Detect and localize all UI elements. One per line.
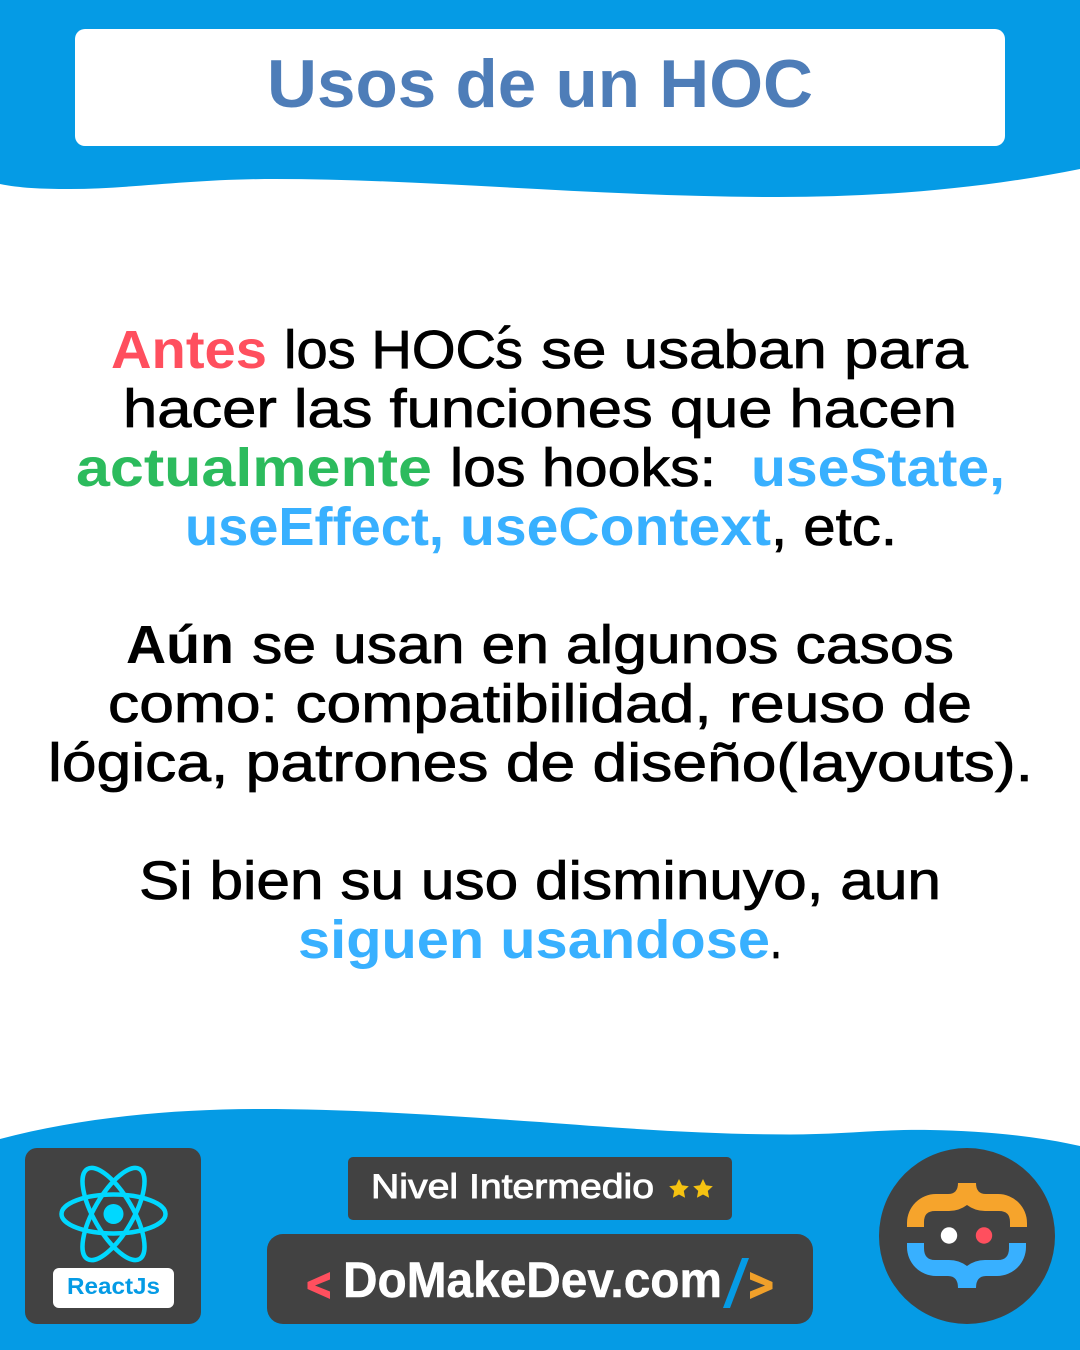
- paragraph 1: s: [495, 320, 523, 380]
- paragraph 1: hacer las funciones que hacen: [123, 379, 957, 439]
- paragraph 1: los hooks:: [450, 438, 716, 498]
- paragraph 3: Si bien su uso disminuyo, aun: [139, 851, 941, 911]
- paragraph 1: , etc.: [771, 497, 897, 557]
- paragraph 1: useEffect,: [185, 497, 444, 557]
- paragraph 1: los HOC: [284, 320, 496, 380]
- paragraph 3: [139, 851, 941, 970]
- paragraph 2: [48, 615, 1033, 793]
- paragraph 2: Aún: [126, 615, 234, 675]
- panel: level badge: [348, 1157, 732, 1220]
- panel: ReactJs badge: [25, 1148, 201, 1324]
- paragraph 3: siguen usandose: [298, 910, 770, 970]
- icon: opening bracket: [308, 1272, 330, 1299]
- paragraph 2: como: compatibilidad, reuso de: [108, 674, 972, 734]
- blue bottom brace: [907, 1243, 1026, 1288]
- orange top brace: [907, 1183, 1027, 1227]
- paragraph 1: se usaban para: [541, 320, 969, 380]
- top wave banner: [0, 0, 1080, 197]
- paragraph 1: useContext: [460, 497, 771, 557]
- bottom wave banner: [0, 1109, 1080, 1350]
- panel: level badge: Nivel Intermedio: [371, 1168, 654, 1206]
- icon: React atom: [62, 1159, 166, 1269]
- paragraph 1: Antes: [111, 320, 267, 380]
- paragraph 1: actualmente: [76, 438, 432, 498]
- eyes: [941, 1227, 992, 1244]
- paragraph 2: se usan en algunos casos: [252, 615, 954, 675]
- panel: DoMakeDev brand: DoMakeDev.com: [343, 1252, 722, 1308]
- panel: DoMakeDev brand: [267, 1234, 813, 1324]
- paragraph 3: .: [770, 910, 782, 970]
- ReactJs label: ReactJs: [67, 1273, 160, 1299]
- title panel: [75, 29, 1005, 146]
- paragraph 1: useState,: [751, 438, 1005, 498]
- icon: closing bracket: [750, 1272, 772, 1299]
- ReactJs label: [53, 1268, 174, 1308]
- paragraph 1: ´: [497, 317, 515, 377]
- body text: [48, 317, 1033, 970]
- paragraph 1: [76, 317, 1005, 557]
- paragraph 2: lógica, patrones de diseño(layouts).: [48, 733, 1033, 793]
- icon: stars: [669, 1179, 713, 1198]
- icon: DoMakeDev logo: [879, 1148, 1055, 1324]
- icon: slash: [723, 1258, 749, 1308]
- title: Usos de un HOC: [267, 46, 813, 122]
